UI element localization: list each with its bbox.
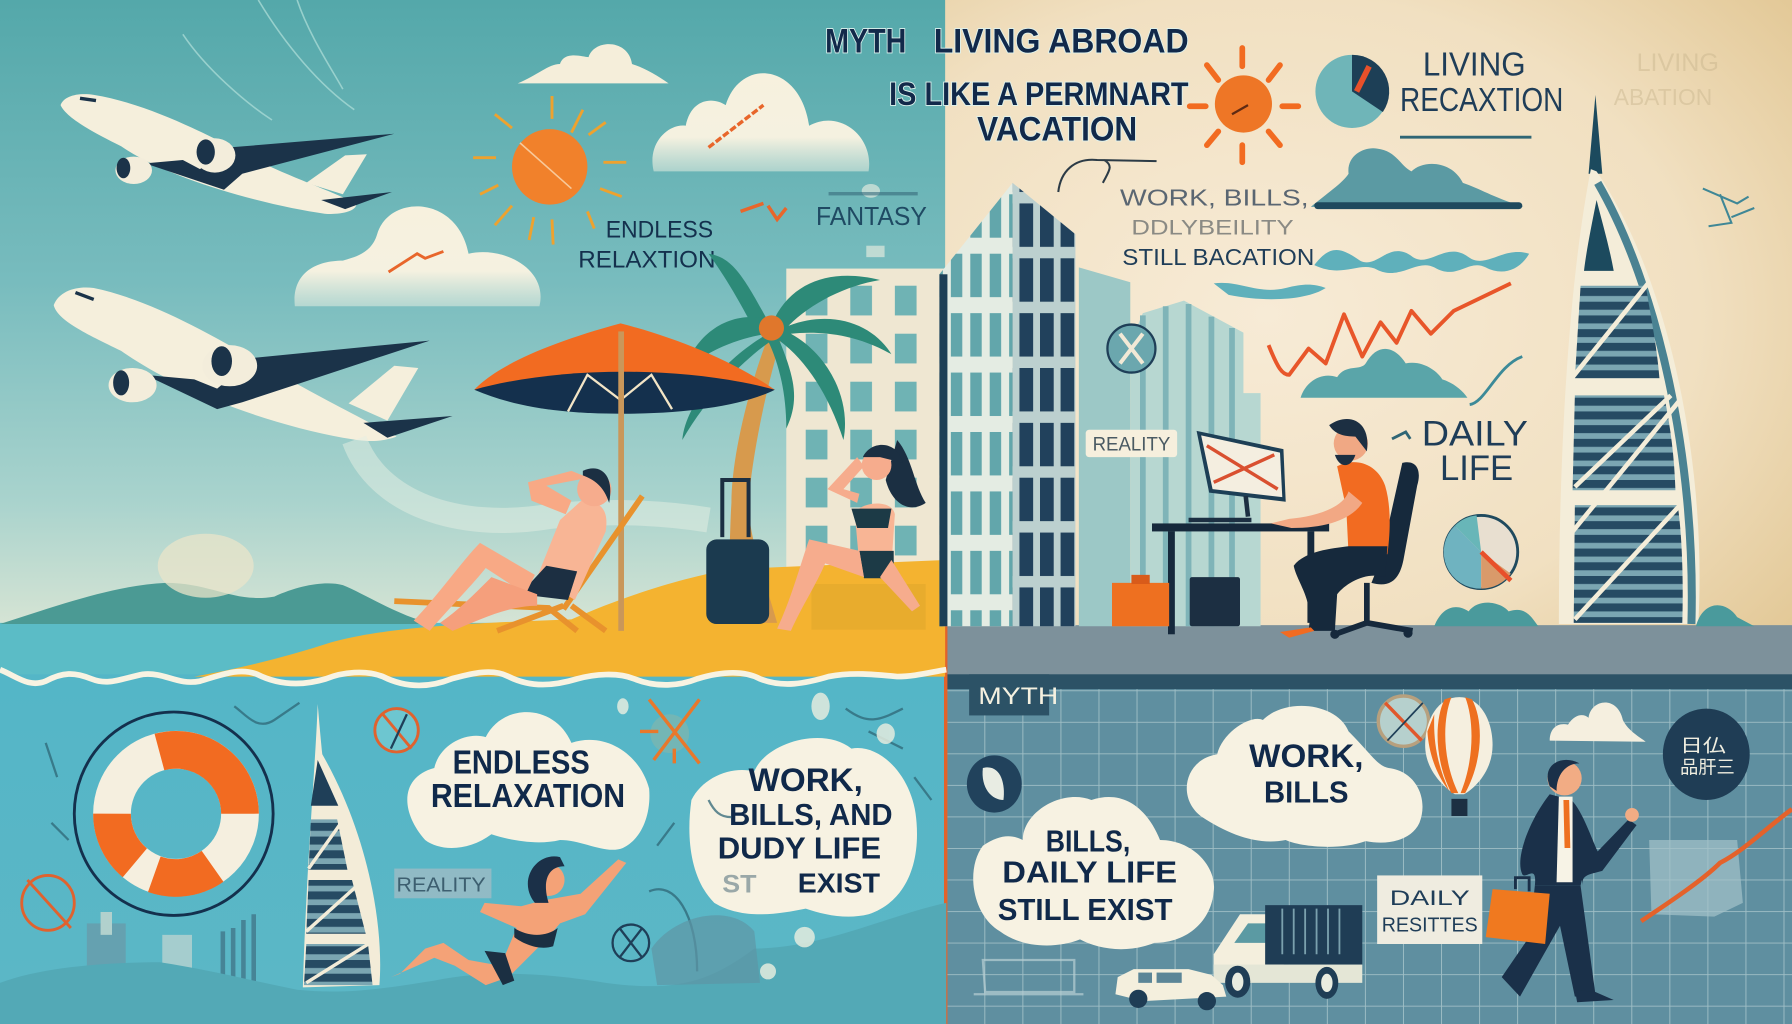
text: living relaxation label: RECAXTION: [1400, 82, 1563, 119]
icon: dark circle left: [967, 755, 1022, 813]
text: fantasy label: FANTASY: [816, 201, 927, 231]
icon: burj tower underwater: [303, 704, 380, 987]
cloud: work bills and daily life: EXIST: [798, 868, 880, 899]
wave line: [0, 670, 946, 685]
panel: sea horizon: [0, 623, 946, 682]
icon: truck: [1214, 905, 1362, 999]
icon: red trend line: [1641, 809, 1792, 921]
sand beach: [194, 560, 945, 677]
icon: distant squiggle: [1703, 189, 1754, 226]
icon: crossed circle left: [22, 875, 74, 930]
text: myth tag: MYTH: [978, 683, 1058, 710]
text: work bills still vacation: [1120, 185, 1314, 270]
label: daily results: [1377, 875, 1482, 944]
cloud: work bills: BILLS: [1264, 774, 1349, 809]
text: daily life: DAILY: [1422, 414, 1528, 454]
icon: top squiggle: [1058, 160, 1157, 192]
text: myth tag: [969, 674, 1058, 715]
icon: dark circle with symbols: 日仏: [1680, 735, 1726, 756]
cloud: endless relaxation: [407, 712, 649, 850]
icon: car: [1115, 969, 1226, 1010]
cloud: bills daily life still exist: BILLS,: [1046, 823, 1130, 858]
cloud: work bills and daily life: ST: [722, 871, 757, 899]
panel: underwater: [0, 674, 946, 1024]
title: VACATION: [977, 111, 1137, 149]
icon: orange toolbox: [1112, 575, 1169, 626]
icon: crossed circle top: [375, 709, 418, 752]
cloud: work bills and daily life: DUDY LIFE: [718, 830, 881, 865]
label: reality underwater: REALITY: [397, 873, 486, 896]
panel: tiled wall: [944, 623, 1792, 1024]
label: reality: REALITY: [1093, 433, 1170, 455]
icon: beach umbrella: [474, 323, 775, 631]
icon: faint shapes around fantasy: [829, 184, 918, 257]
icon: dark box: [1190, 577, 1240, 626]
cloud: work bills and daily life: BILLS, AND: [729, 797, 893, 832]
cloud: small tiled: [1550, 703, 1646, 742]
figure: man on lounger: [394, 468, 642, 631]
icon: contrail: [354, 440, 709, 520]
text: endless relaxation sky label: ENDLESS: [606, 217, 713, 244]
icon: faded bubbles: [617, 693, 895, 979]
text: work bills still vacation: STILL BACATION: [1122, 244, 1314, 270]
icon: dark circle with symbols: [1663, 709, 1750, 800]
cloud: bills daily life still exist: DAILY LIFE: [1002, 854, 1177, 889]
icon: pie chart lower: [1444, 515, 1518, 589]
title: MYTH: [825, 23, 906, 61]
cloud: endless relaxation: RELAXATION: [431, 778, 625, 815]
title: IS LIKE A PERMNART: [889, 76, 1189, 112]
cloud: work bills and daily life: WORK,: [749, 762, 863, 798]
panel: floor: [945, 625, 1792, 677]
cloud: upper sky: [652, 73, 869, 171]
icon: swimmer: [391, 856, 626, 985]
icon: dark circle with symbols: 品肝三: [1680, 757, 1735, 778]
sand block behind woman: [811, 584, 926, 630]
icon: crossed sun: [640, 699, 699, 763]
figure: woman seated: [777, 440, 926, 631]
icon: skyline: [87, 912, 254, 983]
icon: faded scribbles: [46, 703, 931, 971]
cloud: small top: [518, 44, 669, 83]
cloud: work bills and daily life: [689, 738, 917, 917]
text: endless relaxation sky label: RELAXTION: [578, 246, 715, 273]
icon: left sun: [473, 96, 626, 245]
text: faint background label: [1614, 49, 1719, 110]
icon: pie chart top: [1315, 55, 1389, 128]
text: daily life: LIFE: [1440, 448, 1513, 488]
label: daily results: DAILY: [1390, 885, 1470, 910]
water surface: [0, 903, 946, 1024]
icon: hotel building: [786, 269, 946, 625]
text: endless relaxation sky label: [578, 217, 715, 273]
cloud: mid sky: [295, 206, 541, 306]
cloud: endless relaxation: ENDLESS: [453, 745, 590, 782]
icon: red zigzag line: [1269, 283, 1511, 375]
icon: pale building: [1079, 267, 1261, 626]
figure: walking businessman: [1486, 760, 1639, 1002]
icon: small teal wave: [1214, 283, 1326, 299]
icon: burj tower right: [1559, 95, 1700, 624]
icon: right sun: [1190, 48, 1298, 162]
icon: teal wave band: [1314, 250, 1529, 273]
text: daily life: [1422, 414, 1528, 488]
icon: tall office tower: [939, 183, 1075, 626]
label: reality underwater: [394, 869, 491, 898]
cloud: bills daily life still exist: STILL EXIST: [998, 892, 1173, 927]
panel: reality wall: [945, 0, 1792, 629]
icon: faded bed shape: [974, 960, 1083, 994]
icon: dark teal cloud: [1311, 137, 1531, 209]
label: daily results: RESITTES: [1382, 913, 1478, 936]
icon: faded grey shapes: [651, 915, 760, 985]
icon: teal hills cloud: [1301, 349, 1467, 398]
text: faint background label: ABATION: [1614, 84, 1712, 110]
icon: suitcase: [706, 480, 769, 624]
text: living relaxation label: [1400, 46, 1563, 119]
icon: hills: [0, 534, 434, 624]
icon: small orange bird: [741, 203, 786, 219]
text: work bills still vacation: DDLYBEILITY: [1131, 214, 1294, 239]
icon: office chair: [1330, 462, 1419, 639]
icon: upper plane: [61, 94, 394, 214]
icon: lifebuoy: [74, 712, 273, 915]
text: living relaxation label: LIVING: [1423, 46, 1526, 83]
icon: faded paper: [1649, 840, 1743, 917]
cloud: work bills: [1187, 706, 1423, 847]
icon: palm tree: [682, 254, 891, 623]
panel: fantasy sky: [0, 0, 946, 626]
title: LIVING ABROAD: [934, 23, 1189, 61]
icon: crossed tools circle: [613, 925, 649, 961]
icon: desk: [1152, 523, 1329, 634]
figure: man at desk: [1271, 419, 1390, 638]
text: work bills still vacation: WORK, BILLS,: [1120, 185, 1309, 211]
icon: teal tick: [1470, 357, 1522, 405]
icon: monitor with red x: [1189, 431, 1286, 520]
icon: bush near tower: [1434, 603, 1538, 626]
icon: lower plane: [54, 287, 453, 441]
text: faint background label: LIVING: [1637, 49, 1719, 77]
icon: crossed circle tiled: [1378, 696, 1429, 746]
cloud: bills daily life still exist: [973, 797, 1214, 949]
title: [825, 23, 1189, 149]
icon: small bird near daily life: [1392, 432, 1410, 439]
icon: bush right of tower: [1696, 605, 1754, 626]
icon: hot-air balloon: [1425, 697, 1493, 816]
cloud: work bills: WORK,: [1249, 738, 1363, 774]
icon: crossed circle: [1107, 325, 1155, 373]
